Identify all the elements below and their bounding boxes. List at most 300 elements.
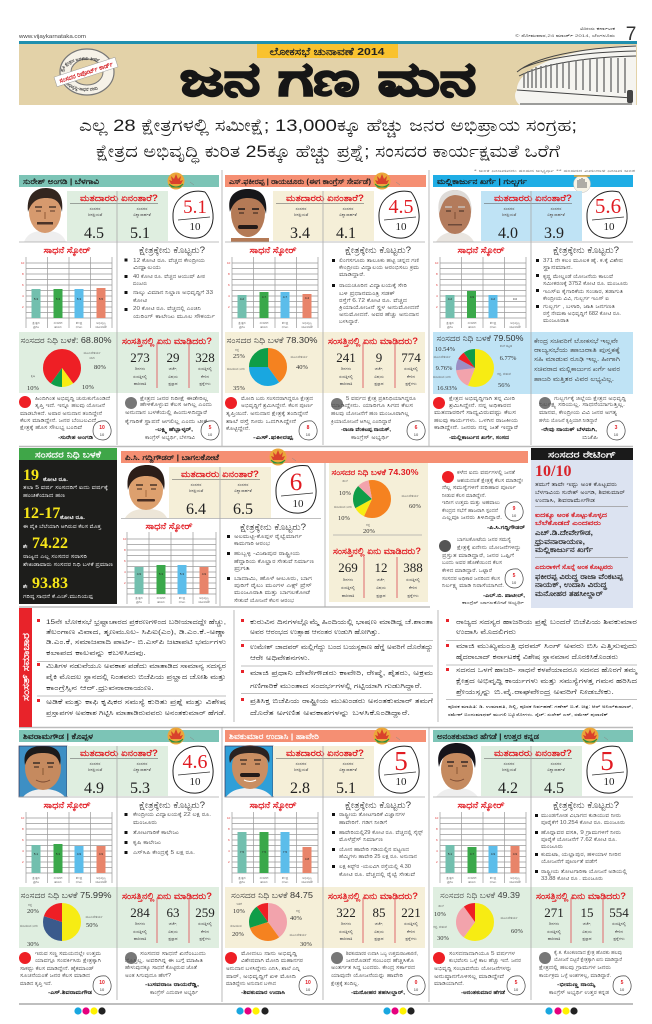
note on minister attendance	[534, 339, 621, 384]
bar chart: achievement score: 5.3	[56, 297, 60, 301]
list: what was given to the constituency: ರಸ್ತೆಗೆ 6.72 ಕೋಟಿ ರೂ. ವೆಚ್ಚದ	[339, 298, 408, 304]
quote: rival: 5	[513, 573, 516, 579]
list: what was given to the constituency: ಸೇತುವೆ ಯೋಜನೆ ಕೆಲಸ ಆರಂಭ	[234, 598, 295, 604]
parliament activity: ಸಂಸತ್ತಿನಲ್ಲಿ	[339, 374, 353, 380]
bar chart: achievement score: ಸಾಧನೆ ಸ್ಕೋರ್	[44, 245, 91, 257]
quote: rival: ಬಾಗಲಕೋಟೆಯ ಜನರ ಸಮಸ್ಯೆ	[457, 537, 511, 543]
parliament activity: ಚರ್ಚೆ,	[169, 921, 177, 926]
quote: rival: ಹೇಳಿಕೊಳ್ಳುವ ಕೆಲಸ ಆಗಿಲ್ಲ ಎಂದು	[140, 402, 213, 408]
pie chart: fund use 79.50%: 16.93%	[437, 385, 458, 392]
bar chart: achievement score: ಸಾಧನೆ ಸ್ಕೋರ್	[250, 245, 297, 257]
quote: rival: ಸಂಸದರ ಸಾಧನೆ ಏನೆಂಬುದು	[140, 951, 207, 957]
bar chart: achievement score: ಅಭಿವೃದ್ಧಿ	[96, 876, 107, 880]
quote: rival: ಗುಲ್ಬರ್ಗಕ್ಕೆ ಜಿಲ್ಲೆಯ ಕ್ಷೇತ್ರದ ಅಭಿವೃದ್ಧಿ	[554, 396, 627, 403]
parliament activity: ಸಂಸತ್ತಿನಲ್ಲಿ	[339, 929, 353, 935]
quote: MP: ಕೆಲಸ ಮಾಡಿದ್ದೇನೆ. ಜನರ ಬೆಂಬಲವಿದೆ	[20, 418, 97, 424]
quote: MP: 9	[513, 506, 516, 512]
voter rating box	[273, 746, 374, 797]
quote: rival: ಶಿವಕುಮಾರರ ಉದಾಸಿ ಒಬ್ಬ ಉತ್ತಮರಾಜಕಾರಣಿ,	[346, 951, 418, 957]
pie chart: fund use 68.80%: 10%	[27, 385, 40, 392]
bar chart: achievement score: 4.9	[470, 295, 474, 299]
pie chart: fund use 79.50%: 6.77%	[500, 355, 517, 362]
quote: MP	[433, 396, 519, 441]
quote: MP: ಅಭಿವೃದ್ಧಿ ಸಂಭಾವನೆಯ ಯೋಜನೆಗಳನ್ನು	[434, 966, 512, 973]
news column 1	[37, 619, 227, 717]
quote: rival: ಕೈ.ಕ. ಕೊಂಕಣದಾದ ಕ್ಷೇತ್ರ ಹೊರತು ಹಲವು	[554, 950, 622, 956]
bar chart: achievement score: ಕೇಂದ್ರ	[282, 321, 289, 325]
quote: rival: ಕಾಂಗ್ರೆಸ್ ಅಭ್ಯರ್ಥಿ	[351, 435, 390, 441]
icon: survey stamp: ಅಭಿವೃದ್ಧಿ-ಸಾಧನೆ ವರದಿ	[66, 83, 98, 92]
list: what was given to the constituency: ಕೇಂದ್ರೀಯ ವಿದ್ಯಾಲಯ ಆರಂಭಿಸಲು ಕ್ರಮ	[339, 265, 419, 272]
fact: 19 crore: ತಲಾ 5 ವರ್ಷ ಸಂಸದರಿಗೆ ಐದು ವರ್ಷಕ್ಕೆ	[23, 485, 108, 491]
quote: MP: ನೆಲ್ಲ ಸಮಸ್ಯೆಗಳಿಗೆ ಪರಿಹಾರ ಪೂರ್ಣ	[442, 485, 517, 491]
list: what was given to the constituency: ವಿದ್ಯಾಲಯ	[133, 265, 162, 272]
bar chart: achievement score: ಕೇಂದ್ರ	[490, 876, 497, 880]
quote: MP: ಹಿಂದಿಗಿಂತ ಅಭಿವೃದ್ಧಿ ಚುರುಕುಗೊಂಡಿದೆ	[35, 396, 111, 403]
pie chart: fund use 84.75: ಮೂಲಸೌಕರ್ಯ	[289, 933, 307, 937]
list: what was given to the constituency: 371 ನೇ ಕಲಂ ಮೂಲಕ ಹೈ. ಕ.ಕ್ಕೆ ವಿಶೇಷ	[543, 258, 624, 264]
bar chart: achievement score: 5.3	[180, 572, 184, 576]
list: what was given to the constituency: 12 ಕೋಟಿ ರೂ. ವೆಚ್ಚದ ಕೇಂದ್ರೀಯ	[133, 258, 206, 264]
quote: MP: ಕ್ಷೇತ್ರಕ್ಕೆ ಹೊಸ ಸೌಲಭ್ಯ ಬಂದಿವೆ	[20, 425, 83, 431]
header bar	[19, 175, 219, 187]
list: what was given to the constituency: ಹೆಮ್ಮಿಗಳು ಹಾವೇರಿ 25 ಲಕ್ಷ ರೂ. ಅನುದಾನ	[339, 854, 417, 860]
fact: 93.83 percent: ಶೇ	[23, 584, 28, 590]
quote: MP: ಇದೀಗ ಉತ್ತಮ ಮತ್ತು ಅಹವಾಲು	[442, 500, 500, 506]
parliament activity: ಚರ್ಚೆ,	[377, 577, 385, 582]
voter rating box: ವಿಶ್ವಾಸಾರ್ಹತೆ	[133, 212, 152, 218]
pie chart: fund use 49.39: ಮೂಲಸೌಕರ್ಯ	[500, 916, 518, 920]
quote: rival: -ಲಕ್ಷ್ಮಿ ಹೆಬ್ಬಾಳ್ಕರ್,	[155, 427, 194, 434]
panel dividers	[19, 170, 222, 447]
banner tag: ಲೋಕಸಭೆ ಚುನಾವಣೆ 2014	[270, 47, 385, 58]
parliament activity: ಕೇಳಿದ	[615, 929, 623, 934]
icon: survey stamp	[54, 48, 118, 96]
parliament activity: ಸಂಸತ್ತಿನಲ್ಲಿ ಏನು ಮಾಡಿದರು?	[328, 336, 418, 348]
score circle: 10	[396, 221, 407, 233]
score circle: 10	[292, 498, 304, 510]
list: what was given to the constituency: ಸ್ಥಾನಮಾನ.	[543, 265, 573, 272]
header bar: ಅನಂತಕುಮಾರ ಹೆಗಡೆ | ಉತ್ತರ ಕನ್ನಡ	[437, 732, 539, 742]
top score 10/10	[535, 463, 625, 504]
parliament activity: ಪ್ರಶ್ನೆಗಳು	[405, 381, 417, 387]
parliament activity: 328	[195, 350, 215, 365]
list: what was given to the constituency: ಕ್ರಿಯಾಯೋಜನೆ ಸ್ಥಳ ಅನುಮೋದನೆ	[338, 305, 420, 312]
bar chart: achievement score: 4	[228, 294, 230, 298]
pie chart: fund use 78.30%: 35%	[233, 385, 246, 392]
header bar	[433, 175, 633, 188]
list: what was given to the constituency: ಯೋಜನೆಗೆ ಪೂರ್ಣತೆ ಪಡೆಗೆ	[541, 859, 598, 865]
bar chart: achievement score: 2	[228, 305, 230, 309]
bar chart: achievement score: ಅಭಿವೃದ್ಧಿ	[199, 596, 210, 600]
fund and parliament section	[433, 332, 633, 394]
list: what was given to the constituency	[227, 522, 315, 604]
quote: rival: ಮಾಡಿದ್ದೇನು. ಯಾರಿಗೂ ಸಿಗದ ಕೆಲಸ	[331, 403, 413, 409]
news column 3: ಮಾಜಿ ಮುಖ್ಯಮಂತ್ರಿ ಧರಮ್ ಸಿಂಗ್ ಅವರು ಬಿಸಿ ಎತ್ತಿಸುವುದು	[456, 643, 637, 651]
list: what was given to the constituency: ಹೆದ್ದಾರಿಯ ಕೊಲ್ಹಾರ ಸೇತುವೆ ನಿರ್ಮಾಣ	[234, 559, 315, 565]
bar chart: achievement score: 8	[124, 548, 126, 552]
pie chart: fund use 78.30%	[226, 336, 318, 392]
bar chart: achievement score: 6	[124, 559, 126, 563]
quote: rival: ಬಂದು ಅವರ ಹೊಣೆಯಿಂದ ಕೆಲಸ	[442, 560, 502, 566]
pie chart: fund use 74.30%: 10%	[339, 490, 352, 497]
parliament activity: 271	[544, 905, 564, 920]
list: what was given to the constituency: ಕ್ಷೇತ್ರಕ್ಕೇನು ಕೊಟ್ಟರು?	[345, 245, 411, 256]
voter rating box: ಸಂಸದರ	[296, 206, 306, 211]
voter rating box	[481, 746, 582, 797]
quote: rival: 0	[415, 980, 418, 986]
fact: 74.22 percent: ರಾಜ್ಯದ ಎಲ್ಲ ಸಂಸದರ ಸರಾಸರಿ	[23, 554, 87, 560]
list: what was given to the constituency: ಲಕ್ಷ ಕಿಷ್ಟ್‌ರ -ಯಲವಿಗಿ ರಸ್ತೆಯಲ್ಲಿ 4.30	[339, 864, 411, 870]
quote: MP: 10	[99, 425, 105, 431]
bar chart: achievement score: ಸಾಧನೆ ಸ್ಕೋರ್	[250, 800, 297, 812]
rivals scored	[535, 564, 624, 600]
quote: rival: ಕಾಂಗ್ರೆಸ್ ಅಭ್ಯರ್ಥಿ ಉತ್ತರ ಕನ್ನಡ	[549, 990, 609, 996]
quote: rival: ಕಾರ್ಯಕ್ರಮ ಒಳ್ಳೆ ಅಂಶಗಳಿಲ್ಲ, ಮಾಡಿದ್ದಾರೆ.	[539, 973, 611, 979]
score circle: 10	[396, 776, 407, 788]
list: what was given to the constituency: ಕ್ಷೇತ್ರಕ್ಕೇನು ಕೊಟ್ಟರು?	[139, 800, 205, 811]
quote: rival: ಕ್ಷೇತ್ರಕ್ಕೆ ತಂದಿಲ್ಲ.	[331, 981, 359, 987]
fact: 74.22 percent: ಶೇ	[23, 544, 28, 550]
list: what was given to the constituency: ಕಾಮಗಾರಿ ಆರಂಭ	[234, 541, 271, 547]
news column 3: ಕ್ಷೇತ್ರದ ಅಭಿವೃದ್ಧಿ ಕಾರ್ಯಗಳು ಮತ್ತು ಸಮಸ್ಯೆಗಳತ್ತ ಗಮನ ಹರಿಸಿದ	[456, 678, 637, 686]
quote: rival: 5	[209, 425, 212, 431]
bar chart: achievement score: 7.5	[262, 850, 266, 854]
pie chart: fund use 79.50%: 9.76%	[436, 365, 453, 372]
pie chart: fund use 79.50%: 10.54%	[435, 346, 456, 353]
list: what was given to the constituency: ಮಂಜೂರು	[133, 820, 158, 826]
quote: rival: ಯೋಜನೆ ಬಿಟ್ಟರೆ ಕ್ಷೇತ್ರಕ್ಕಾಗಿ ಏನು ಮಾಡಿದ್ದಾರೆ	[554, 957, 623, 963]
panel dividers	[225, 170, 429, 447]
website address: www.vijaykarnataka.com	[18, 34, 86, 40]
list: what was given to the constituency: ಹುಬ್ಬಳ್ಳಿ -ವಿಜಾಪುರ ರಾಷ್ಟ್ರೀಯ	[234, 551, 301, 558]
list: what was given to the constituency: ಮುಂಡಗೋಡ ವಿಭಾಗದ ಕುಡಿಯುವ ನೀರು	[541, 813, 621, 819]
pie chart: fund use 74.30%: ಕುಡಿಯುವ ನೀರು	[334, 505, 352, 509]
bar chart: achievement score: 4	[22, 849, 24, 853]
bar chart: achievement score: ಹಾಜರಿ	[260, 880, 268, 884]
black panel body	[19, 460, 117, 604]
bar chart: achievement score: ಸಂಸದರ	[260, 876, 269, 880]
fact: 19 crore: 19	[23, 467, 39, 484]
bar chart: achievement score: 6	[436, 283, 438, 287]
parliament activity: 12	[374, 560, 388, 575]
quote: MP	[225, 396, 317, 441]
bar chart: achievement score: ಹಾಜರಿ	[54, 880, 62, 884]
pie chart: fund use 84.75: 10%	[233, 908, 246, 915]
parliament activity: ವಿಷಯ	[376, 585, 387, 590]
bar chart: achievement score: 2	[436, 305, 438, 309]
news column 1: ಮಿತಿಗಳ ನಡುವೆಯೂ ಅವಕಾಶ ಪಡೆದು ಮಾತಾಡಿದ ಸಾಮಾನ್ಯ ಸದಸ್ಯರ	[46, 663, 227, 671]
quote: MP: 10	[305, 980, 311, 986]
bar chart: achievement score: ನಂಟು	[76, 880, 82, 884]
voter rating box: 5.1	[336, 780, 356, 797]
quote: rival: -ರೇವು ನಾಯಕ್ ಬೆಳಮಗಿ,	[541, 427, 598, 433]
panel dividers	[433, 191, 633, 445]
quote: MP: ಸಂಸದನಾದಾಗಿಯೂ 5 ವರ್ಷಗಳ	[449, 951, 515, 957]
edition and date line	[515, 26, 616, 38]
voter rating box: ಮತದಾರರು ಏನಂತಾರೆ?	[80, 193, 158, 203]
quote: MP: ಕೇಂದ್ರದ ಸಭೆಗೆ ಹಾಜರಾಗಿ ಸ್ಪಂದನೆ	[442, 508, 499, 514]
bar chart: achievement score	[123, 521, 216, 604]
voter rating box: ಸಂಸದರ	[191, 482, 201, 487]
voter rating box: ವಿಶ್ವಾಸಾರ್ಹತೆ	[234, 488, 253, 494]
parliament activity: 15	[580, 905, 594, 920]
divider rule	[333, 534, 422, 536]
bar chart: achievement score: ಪ್ರಗತಿ	[135, 600, 142, 604]
parliament activity: ಪ್ರಶ್ನೆಗಳು	[199, 381, 211, 387]
bar chart: achievement score	[435, 245, 526, 329]
list: what was given to the constituency: ಮಂಜೂರು	[133, 281, 147, 287]
lowest self-rating: ಮಲ್ಲಿಕಾರ್ಜುನ ಖರ್ಗೆ	[535, 547, 593, 554]
photo of MP	[225, 745, 273, 797]
bar chart: achievement score: 4	[436, 294, 438, 298]
quote: rival: ಗೊತ್ತಿಲ್ಲ. ಅವರಿಗಿನ್ನ ಈ ಬಗ್ಗೆ ಮಾಹಿತಿ	[125, 958, 203, 964]
quote: MP: ಮಾಡಿದ ತೃಪ್ತಿ ಇದೆ.	[20, 981, 52, 987]
parliament activity: ಸಂಸತ್ತಿನಲ್ಲಿ	[404, 366, 418, 372]
parliament activity	[328, 336, 421, 388]
news column 1: ಡಿ.ಎಂ.ಕೆ, ಸಮಾಜವಾದಿ ಪಾರ್ಟಿ- ಬಿ.ಎಸ್‌ಪಿ ಜಟಾಪಟಿ ಭರ್ಮಗಳು	[46, 639, 226, 646]
note on minister attendance: ಸಚಿವರಾದ ಮಲ್ಲಿಕಾರ್ಜುನ ಖರ್ಗೆ ಅವರ	[534, 367, 620, 373]
quote: rival: 10	[414, 987, 419, 992]
parliament activity: ದಿನಗಳು	[135, 366, 146, 371]
fact: 19 crore	[23, 467, 108, 499]
quote: rival	[125, 396, 219, 441]
rivals scored: ಮನೋಹರ ತಹಸೀಲ್ದಾರ್	[535, 591, 604, 600]
quote: rival: 10	[414, 432, 419, 437]
quote: rival	[439, 537, 526, 606]
parliament activity: 9	[376, 350, 382, 365]
voter rating box	[273, 191, 374, 242]
fact: 19 crore: ಹಂಚಿಕೆಯಾದ ಹಣ	[23, 493, 66, 499]
rivals scored: ಫಕೀರಪ್ಪ ವಿರುದ್ಧ ರಾಜಾ ವೆಂಕಟಪ್ಪ	[535, 574, 624, 583]
pie chart: fund use 74.30%: 20%	[363, 528, 376, 535]
quote: rival	[330, 396, 425, 441]
news column 1: ತೆಲಂಗಾಣ ವಿವಾದ, ತೃಣಮೂಲ- ಸಿಪಿಐ(ಎಂ), ಡಿ.ಎಂ.ಕೆ.-ಅಣ್ಣಾ	[46, 629, 226, 637]
pie chart: fund use 78.30%: 40%	[296, 364, 309, 371]
parliament activity: 63	[166, 905, 180, 920]
bar chart: achievement score: 10	[227, 261, 231, 265]
list: what was given to the constituency: ಹೊನ್ನಾವರ ವಸತಿ, 9 ಗ್ರಾಮಗಳಿಗೆ ನೀರು	[541, 830, 622, 836]
bar chart: achievement score: ಕ್ಷೇತ್ರದ	[32, 876, 40, 880]
list: what was given to the constituency: ಪೂರೈಕೆಗೆ 10.254 ಕೋಟಿ ರೂ. ಮಂಜೂರು	[541, 820, 625, 826]
lowest self-rating: ಎಚ್.ಡಿ.ದೇವೇಗೌಡ,	[535, 530, 593, 537]
score circle	[587, 191, 627, 238]
parliament activity: ಸಂಸತ್ತಿನಲ್ಲಿ	[198, 366, 212, 372]
fact: 93.83 percent: ಗರಿಷ್ಠ ಸಾಧನೆ ಕೆ.ಎಚ್.ಮುನಿಯಪ್ಪ	[23, 594, 94, 600]
news column 2: ಮಾಜಿ ಪ್ರಧಾನಿ ದೇವೇಗೌಡರು ಕಾವೇರಿ, ರೇಷ್ಮೆ, ಶೈತರು, ಅಕ್ರಮ	[250, 670, 433, 677]
pie chart: fund use 75.99%: 30%	[27, 941, 40, 948]
voter rating box: ಸಂಸದರ	[504, 761, 514, 766]
bar chart: achievement score: ಕ್ಷೇತ್ರದ	[446, 321, 454, 325]
voter rating box: ಸಂಸದರ	[296, 761, 306, 766]
rivals scored: ನಾಯಕ್, ಉದಾಸಿ ವಿರುದ್ಧ	[535, 582, 608, 591]
bar chart: achievement score: 4.2	[448, 297, 452, 301]
pie chart: fund use 79.50%: ರಸ್ತೆ, ಸೇತುವೆ	[497, 372, 512, 376]
fund and parliament section	[225, 332, 425, 393]
pie chart: fund use 79.50%	[433, 334, 524, 392]
bar chart: achievement score: ನಂಟು	[282, 880, 288, 884]
icon: survey stamp: ಸಂಸದರ ರಿಪೋರ್ಟ್ ಕಾರ್ಡ್	[59, 61, 115, 85]
pie chart: fund use 75.99%: ಕುಡಿಯುವ ನೀರು	[20, 924, 38, 928]
pie chart: fund use 75.99%: ಮೂಲಸೌಕರ್ಯ	[85, 915, 103, 919]
pie chart: fund use 68.80%	[20, 336, 112, 392]
bar chart: achievement score: 2	[22, 860, 24, 864]
pie chart: fund use 68.80%: ಸಂಸದರ ನಿಧಿ ಬಳಕೆ: 68.80%	[20, 336, 112, 345]
bar chart: achievement score: ಸಂಸದರ	[260, 321, 269, 325]
header bar: ಶಿವರಾಮಗೌಡ | ಕೊಪ್ಪಳ	[23, 732, 94, 742]
list: what was given to the constituency: ಯೋನ ಹಾವೇರಿ ಗಡಿಯಲ್ಲಿನ ಪಟ್ಟಣದ	[339, 847, 410, 853]
list: what was given to the constituency: ಮೊಳೆಪ್ರೆಸ್‌ ನಿರ್ಮಾಣ	[339, 837, 384, 843]
list: what was given to the constituency: ಸಮೀಕರಣಕ್ಕೆ 3752 ಕೋಟಿ ರೂ. ಮಂಜೂರು	[543, 281, 628, 287]
news column 2: ಪ್ರತಿಸಿಕ್ತ ಬಿಜೆಪಿಯ ರಾಷ್ಟ್ರೀಯ ಮುಖಂಡರು ಅನಂತಕುಮಾರ್ ತಮಗೆ	[249, 698, 434, 706]
pie chart: fund use 49.39: 30%	[437, 935, 450, 942]
list: what was given to the constituency: ಪ್ರಗತಿ	[233, 566, 251, 572]
icon: party logo	[168, 172, 194, 190]
quote: rival: -ಮನೋಹರ ತಹಸೀಲ್ದಾರ್,	[351, 990, 406, 996]
voter rating box: ಮತದಾರರು ಏನಂತಾರೆ?	[80, 748, 158, 758]
bar chart: achievement score: 4	[22, 294, 24, 298]
photo of MP	[24, 188, 66, 242]
list: what was given to the constituency: ಕ್ಷೇತ್ರಕ್ಕೇನು ಕೊಟ್ಟರು?	[345, 800, 411, 811]
voter rating box: 4.5	[544, 780, 564, 797]
bar chart: achievement score: ನಂಟು	[490, 325, 496, 329]
bar chart: achievement score: ಪ್ರಗತಿ	[446, 325, 453, 329]
pie chart: fund use 84.75: ರಸ್ತೆ	[296, 909, 301, 913]
fund and parliament section	[433, 887, 633, 948]
parliament activity: 273	[130, 350, 150, 365]
news column 2: ಅವರ ಆರಂಭದ ಉತ್ಸಾಹ ಆನಂತರ ಉಡುಗಿ ಹೋಗಿತ್ತು.	[250, 629, 380, 636]
bar chart: achievement score: 10	[227, 816, 231, 820]
news column 1: ಪೈಕಿ ಮೊದಲ ಸ್ಥಾನದಲ್ಲಿ ನಿಂತವರು ಬಿಜೆಪಿಯ ಪ್ರಲ್ಹಾದ ಜೋಶಿ ಮತ್ತು	[46, 674, 226, 682]
quote: MP	[442, 470, 525, 531]
bar chart: achievement score: ಹಾಜರಿ	[157, 600, 165, 604]
news column 1: ಕಾಂಗ್ರೆಸ್ಸಿನ ಆರ್.ಧ್ರುವನಾರಾಯಣ.	[46, 685, 154, 692]
parliament activity: 241	[336, 350, 356, 365]
list: what was given to the constituency: ಮಂಜೂರು	[541, 844, 563, 850]
bar chart: achievement score: ಕೇಂದ್ರ	[76, 876, 83, 880]
bar chart: achievement score: 6	[22, 838, 24, 842]
quote: rival: ನಿರ್ಲಕ್ಷ್ಯ ಸರಿಯಲ್ಲ. ಸಾಧನೆಯಾಗುತ್ತಿಲ್ಲ.	[539, 402, 625, 409]
parliament activity: ಸಂಸತ್ತಿನಲ್ಲಿ	[341, 585, 355, 591]
bar chart: achievement score	[21, 800, 112, 884]
parliament activity: 29	[166, 350, 180, 365]
list: what was given to the constituency	[535, 800, 627, 882]
quote: MP: ಕುಭವೆಂಸು ಒಳ್ಳೆ ಕಾಲ ಹೆಚ್ಚು ಇದೆ. ಜನರ	[449, 958, 521, 964]
pie chart: fund use 68.80%: ಕೃಷಿ	[31, 374, 36, 378]
pie chart: fund use 78.30%: ರಸ್ತೆ	[235, 348, 240, 352]
bar chart: achievement score: 4.9	[491, 852, 495, 856]
list: what was given to the constituency: ರಾಷ್ಟ್ರೀಯ ತೋಟಗಾರಿಕೆ ವಿಜ್ಞಾನಗಳ	[339, 812, 405, 819]
quote: MP: ಮಾಡಿದ್ದೇನು ಅನುದಾನ ಬಳಸಿದ	[226, 981, 277, 987]
photo of MP	[19, 746, 67, 797]
bar chart: achievement score: 7.5	[240, 850, 244, 854]
parliament activity: ಪ್ರಶ್ನೆಗಳು	[405, 936, 417, 942]
quote: MP: ನೀಡುವ ಕೆಲಸ ಮಾಡಿದ್ದೇನೆ.	[442, 493, 486, 499]
bar chart: achievement score: 8	[436, 827, 438, 831]
quote: MP: ಅಭಿವೃದ್ಧಿಗೆ ಶ್ರಮಿಸಿದ್ದೇನೆ. ಕೆಲಸ ಪೂರ್ಣ	[241, 403, 313, 410]
quote: MP	[225, 951, 317, 996]
panel heading	[19, 448, 117, 460]
quote: rival: ಕ್ಷೇತ್ರದ ಜನರ ನಿರೀಕ್ಷೆ ಈಡೇರಿಲ್ಲ	[140, 396, 209, 402]
quote: rival: ಪ್ರಸ್ತುತ ಮಾಡಿದ್ದಾರೆ, ಜನರ ಒಪ್ಪಿಗೆ	[441, 553, 515, 559]
quote: MP: 10	[514, 987, 519, 992]
bar chart: achievement score: ಪ್ರಗತಿ	[238, 325, 245, 329]
bar chart: achievement score: ಅಭಿವೃದ್ಧಿ	[302, 876, 313, 880]
pie chart: fund use 74.30%: ಮೂಲಸೌಕರ್ಯ	[401, 494, 419, 498]
quote: MP: 10	[306, 432, 311, 437]
parliament activity: ಸಂಸತ್ತಿನಲ್ಲಿ	[133, 929, 147, 935]
pie chart: fund use 74.30%: ಸಂಸದರ ನಿಧಿ ಬಳಕೆ 74.30%	[332, 468, 418, 477]
score circle	[276, 465, 316, 513]
score circle	[173, 746, 213, 793]
pie chart: fund use 74.30%: 60%	[409, 503, 422, 510]
bar chart: achievement score: ನಂಟು	[179, 600, 185, 604]
voter rating box: ಜನಪ್ರಿಯತೆ	[88, 212, 103, 218]
parliament activity: ಸಂಸತ್ತಿನಲ್ಲಿ	[404, 921, 418, 927]
voter rating box: ವಿಶ್ವಾಸಾರ್ಹತೆ	[547, 767, 566, 773]
voter rating box: ಮತದಾರರು ಏನಂತಾರೆ?	[494, 193, 572, 203]
main headline: ಎಲ್ಲ 28 ಕ್ಷೇತ್ರಗಳಲ್ಲಿ ಸಮೀಕ್ಷೆ; 13,000ಕ್ಕೂ ಹೆಚ್ಚು ಜನರ ಅಭಿಪ್ರಾಯ ಸಂಗ್ರಹ;	[79, 116, 577, 137]
parliament activity: ಪ್ರಸ್ತಾಪ	[168, 936, 178, 942]
pie chart: fund use 75.99%	[20, 891, 112, 948]
bar chart: achievement score: ಹಾಜರಿ	[468, 325, 476, 329]
list: what was given to the constituency: ಇಎಸ್‌ಐ ಕೈಗಾರಿಕೆಯ ಸಂಚಾರ, ತಡಾಗುತಿ	[543, 289, 623, 295]
parliament activity: ಹಾಜರಾತಿ	[342, 593, 354, 598]
pie chart: fund use 78.30%: 25%	[233, 353, 246, 360]
list: what was given to the constituency: ಕ್ಷೇತ್ರಕ್ಕೇನು ಕೊಟ್ಟರು?	[553, 245, 619, 256]
parliament activity: ಹಾಜರಾತಿ	[340, 936, 352, 941]
quote: MP: ಕೊಟ್ಟಿದ್ದೇನೆ.	[226, 426, 250, 432]
quote: MP: 10	[512, 513, 517, 518]
voter rating box: ಸಂಸದರ	[551, 761, 561, 766]
parliament activity: ಚರ್ಚೆ,	[169, 366, 177, 371]
quote: MP: ಎಲ್ಲವೂ ಜನರು ತಿಳಿದಿದ್ದಾರೆ.	[442, 515, 502, 521]
header bar	[225, 730, 426, 742]
bar chart: achievement score: ಅಭಿವೃದ್ಧಿ	[96, 321, 107, 325]
list: what was given to the constituency: ನಾಲ್ಕು ವಿಮಾನ ನಿಲ್ದಾಣ ಅಭಿವೃದ್ಧಿಗೆ 33	[133, 290, 213, 297]
pie chart: fund use 49.39: ರಸ್ತೆ, ಸೇತುವೆ	[433, 925, 448, 929]
score circle: 4.6	[182, 751, 208, 773]
lowest self-rating: ಬೆಲೆಕೊಡದೆ ಎಂದವರು	[535, 520, 601, 527]
voter rating box: ವಿಶ್ವಾಸಾರ್ಹತೆ	[339, 212, 358, 218]
quote: rival: ಹಳೆಯ ಯೋಜನೆ ತೃಪ್ತಿಯಾಗಿ ನೀಡಿದ್ದಾರೆ	[539, 418, 598, 424]
quote: rival	[539, 950, 631, 996]
bar chart: achievement score: ಕ್ಷೇತ್ರದ	[238, 876, 246, 880]
pie chart: fund use 84.75: ಇತರೆ	[236, 902, 243, 906]
parliament activity	[122, 336, 215, 388]
quote: rival: ಅಂತ ಸಿಗುವುದೂ ಹೇಗೆ?	[125, 973, 171, 979]
panel dividers	[225, 727, 429, 1002]
quote: MP: 10	[306, 987, 311, 992]
parliament activity: ಸಂಸತ್ತಿನಲ್ಲಿ ಏನು ಮಾಡಿದರು?	[122, 891, 212, 903]
list: what was given to the constituency: ಕ್ಷೇತ್ರಕ್ಕೇನು ಕೊಟ್ಟರು?	[553, 800, 619, 811]
fact: 12-17 crore: 12-17	[23, 505, 60, 522]
news column 1: ಅಡಿಕೆ ಮತ್ತು ಕಾಫಿ ಕೃಷಿಕರ ಸಮಸ್ಯೆ ಕುರಿತು ಪ್ರಶ್ನೆ ಮತ್ತು ವಿಶೇಷ	[46, 699, 227, 707]
news column 1: ಕಲಾಪದ ಕಾಲವನ್ನು ಕಬಳಿಸಿದವು.	[46, 650, 146, 657]
bar chart: achievement score: ಚಟುವಟಿಕೆ	[198, 600, 211, 604]
quote: MP: -ಎಸ್.ಶಿವರಾಮಗೌಡ	[48, 990, 93, 996]
parliament activity: ಸಂಸತ್ತಿನಲ್ಲಿ ಏನು ಮಾಡಿದರು?	[328, 891, 418, 903]
parliament activity: ಪ್ರಶ್ನೆಗಳು	[407, 593, 419, 599]
quote: MP: ಅನುಷ್ಠಾನಗೊಳಿಸಲ್ಲ ಮಾಡಿದ್ದೇವೆ	[434, 974, 505, 980]
quote: rival: ಹೇಳುವುದಕ್ಕೂ ಸಾಧನೆ ಕೊಟ್ಟಿರುವ ಜೊತೆ	[125, 965, 198, 971]
list: what was given to the constituency: ಕುಮಟಾ, ಯಲ್ಲಾಪುರ, ಹಳಿಯಾಳ ನೀರಿನ	[541, 852, 621, 858]
voter rating box: 5.3	[130, 780, 150, 797]
fund and parliament section	[19, 332, 219, 393]
list: what was given to the constituency: ಅಲಮಟ್ಟಿ-ಕೊಪ್ಪಳ ರೈಲ್ವೆಮಾರ್ಗ	[234, 534, 303, 540]
list: what was given to the constituency: ಪುರಿಗೆ ರೈಲು ಮಂಗಳ ಎಕ್ಸ್ ಪ್ರೆಸ್	[234, 583, 312, 589]
edition and date line: ವಿಜಯ ಕರ್ನಾಟಕ	[580, 26, 615, 31]
